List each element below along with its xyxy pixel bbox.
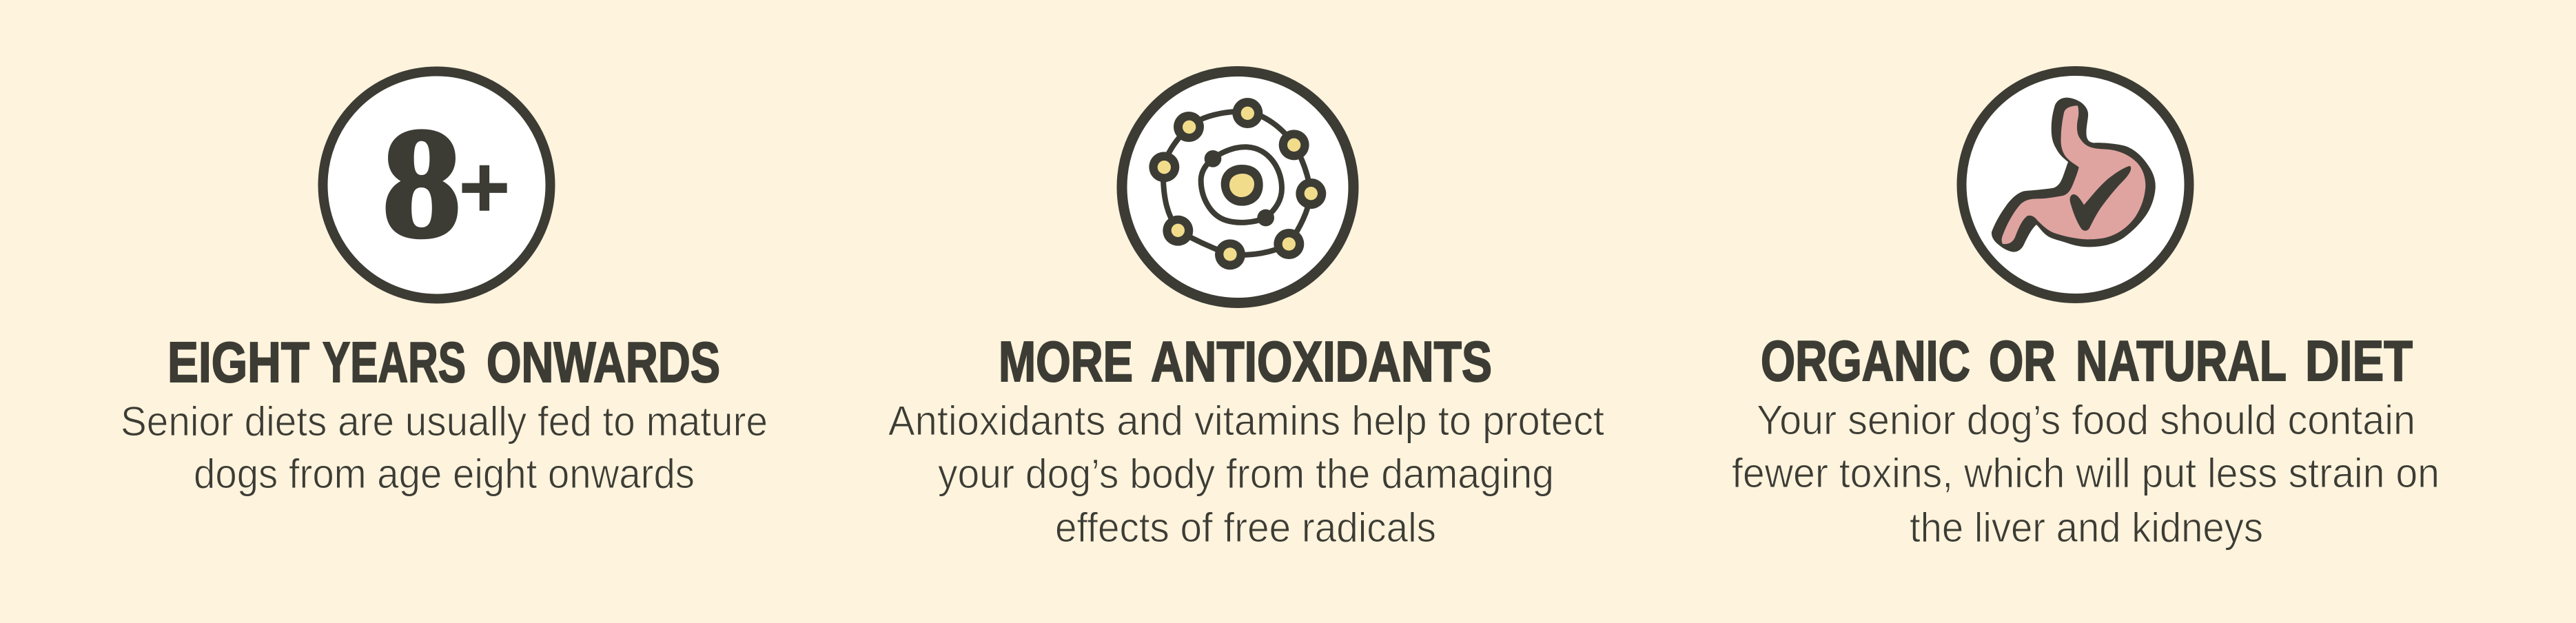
text block: organic or natural diet: Your senior dog’s food should contain bbox=[1757, 397, 2415, 443]
text block: organic or natural diet: fewer toxins, which will put less strain on bbox=[1732, 450, 2440, 496]
icon: stomach with check mark bbox=[1961, 71, 2189, 298]
heading: eight years onwards bbox=[167, 330, 720, 394]
heading: more antioxidants: ANTIOXIDANTS bbox=[1151, 329, 1492, 394]
heading: organic or natural diet: ORGANIC bbox=[1761, 329, 1970, 393]
text block: more antioxidants: effects of free radicals bbox=[1055, 504, 1436, 551]
icon: 8+ badge bbox=[323, 72, 550, 299]
heading: more antioxidants bbox=[999, 329, 1492, 394]
panel: eight years onwards bbox=[121, 72, 768, 497]
panel: more antioxidants bbox=[888, 72, 1604, 551]
text block: eight years onwards: dogs from age eight onwards bbox=[194, 451, 695, 497]
heading: more antioxidants: MORE bbox=[999, 329, 1133, 394]
heading: organic or natural diet: DIET bbox=[2305, 329, 2413, 393]
text block: organic or natural diet: the liver and kidneys bbox=[1910, 504, 2263, 551]
text block: more antioxidants bbox=[888, 398, 1604, 551]
text block: eight years onwards: Senior diets are usually fed to mature bbox=[121, 398, 768, 445]
heading: eight years onwards: YEARS bbox=[323, 330, 466, 394]
text block: more antioxidants: your dog’s body from the damaging bbox=[938, 451, 1554, 497]
text block: more antioxidants: Antioxidants and vitamins help to protect bbox=[888, 398, 1604, 444]
heading: organic or natural diet bbox=[1761, 329, 2413, 393]
heading: organic or natural diet: NATURAL bbox=[2076, 329, 2287, 393]
heading: eight years onwards: EIGHT bbox=[167, 330, 309, 394]
panel: organic or natural diet bbox=[1732, 71, 2440, 551]
icon: 8+ badge: 8 bbox=[382, 96, 461, 270]
icon: 8+ badge: + bbox=[458, 136, 511, 237]
heading: organic or natural diet: OR bbox=[1989, 329, 2056, 393]
text block: organic or natural diet bbox=[1732, 397, 2440, 551]
text block: eight years onwards bbox=[121, 398, 768, 497]
icon: atom with electrons bbox=[1122, 72, 1353, 303]
heading: eight years onwards: ONWARDS bbox=[487, 330, 720, 394]
